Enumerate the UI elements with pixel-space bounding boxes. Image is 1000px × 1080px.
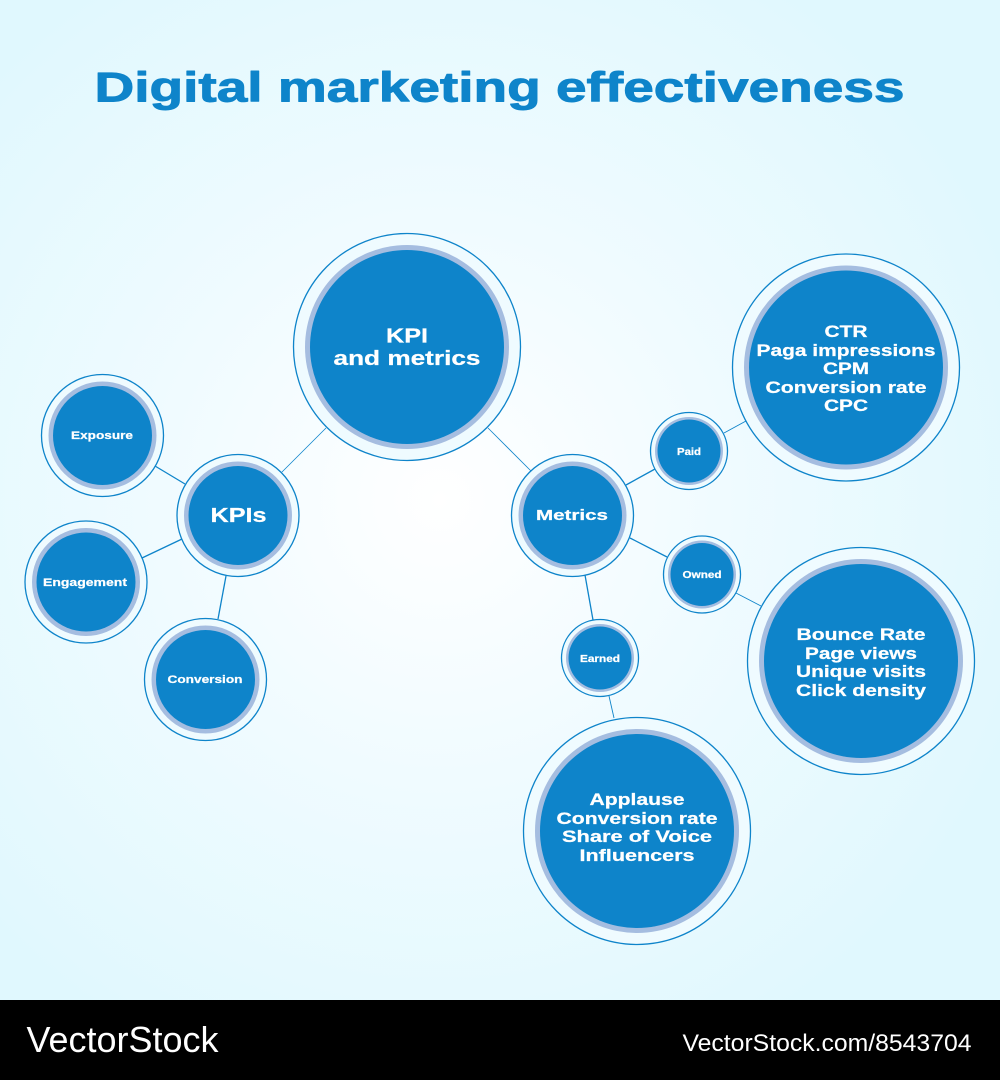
watermark bar: [0, 1000, 1000, 1080]
node: Metrics: Metrics: [536, 507, 608, 524]
node: Owned metrics: [748, 548, 974, 774]
node: Owned: Owned: [682, 570, 722, 581]
node: KPI and metrics: [294, 234, 520, 460]
node: Owned metrics: Page views: [805, 645, 917, 663]
node: KPIs: KPIs: [210, 505, 266, 527]
node: KPIs: [177, 454, 299, 576]
node: Owned: [664, 536, 740, 613]
node: KPI and metrics: KPI: [386, 324, 428, 348]
node: Paid metrics: CPM: [823, 360, 869, 378]
node: Paid metrics: CTR: [824, 323, 868, 341]
node: Paid metrics: Conversion rate: [766, 379, 926, 397]
node: Owned metrics: Click density: [796, 682, 927, 700]
node: Engagement: [25, 521, 147, 643]
node: Exposure: Exposure: [71, 430, 133, 442]
connector lines: [142, 421, 761, 718]
node: Owned metrics: Unique visits: [796, 663, 926, 681]
node: Paid metrics: CPC: [824, 397, 868, 415]
node: Earned metrics: Conversion rate: [556, 810, 718, 828]
node: Earned: [562, 620, 638, 696]
node: Metrics: [512, 454, 634, 576]
title: Digital marketing effectiveness: [94, 64, 904, 110]
node: Paid metrics: [732, 254, 960, 481]
node: Conversion: [144, 618, 266, 740]
node: Exposure: [42, 374, 164, 496]
node: Earned metrics: Influencers: [580, 847, 694, 865]
node: Paid: [650, 412, 728, 490]
watermark url: VectorStock.com/8543704: [682, 1030, 972, 1057]
node: KPI and metrics: and metrics: [334, 347, 480, 370]
node: Paid metrics: Paga impressions: [756, 342, 936, 360]
node: Owned metrics: Bounce Rate: [796, 626, 926, 644]
node: Earned metrics: [524, 718, 750, 944]
node: Conversion: Conversion: [168, 674, 243, 686]
node: Engagement: Engagement: [43, 577, 127, 589]
node: Paid: Paid: [677, 447, 701, 458]
node: Earned metrics: Share of Voice: [562, 828, 712, 846]
node: Earned: Earned: [580, 654, 620, 665]
watermark logo text: VectorStock: [26, 1019, 219, 1060]
node: Earned metrics: Applause: [590, 791, 684, 809]
